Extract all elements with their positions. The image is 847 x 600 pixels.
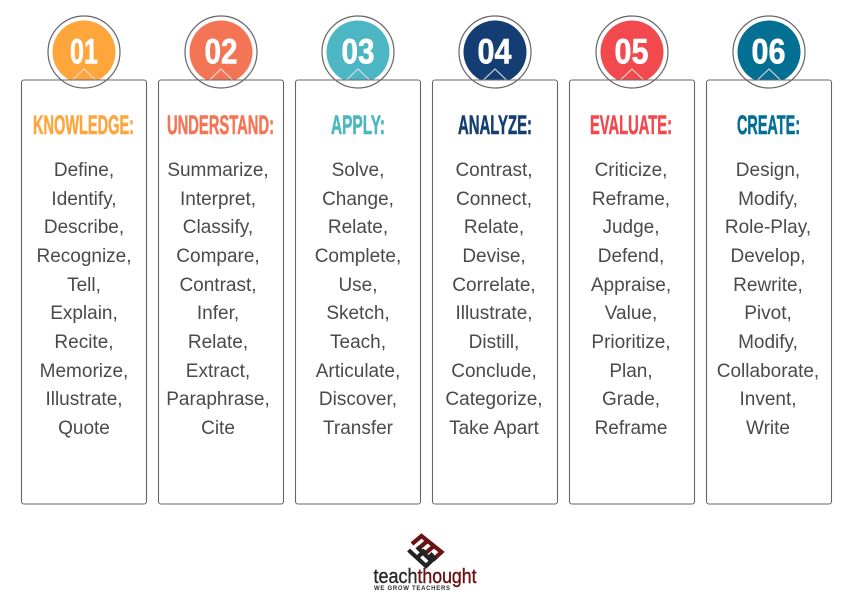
word list: Cite [201, 418, 235, 439]
word list: Reframe [595, 418, 667, 439]
heading: UNDERSTAND: [167, 110, 274, 140]
badge 04 [459, 16, 531, 88]
panel: apply [296, 16, 420, 504]
word list: Rewrite, [733, 275, 803, 296]
word list: Role-Play, [725, 217, 811, 238]
word list: Devise, [462, 246, 526, 267]
badge 06: 06 [752, 32, 786, 72]
word list: Classify, [183, 217, 253, 238]
word list: Grade, [602, 389, 660, 410]
word list: Appraise, [591, 275, 671, 296]
word list: Discover, [319, 389, 397, 410]
word list: Complete, [315, 246, 401, 267]
word list: Transfer [323, 418, 394, 439]
word list: Collaborate, [717, 361, 819, 382]
word list: Value, [605, 303, 657, 324]
badge 03 [322, 16, 394, 88]
word list: Correlate, [452, 275, 536, 296]
heading: EVALUATE: [590, 110, 672, 140]
word list: Tell, [67, 275, 101, 296]
word list: Use, [338, 275, 378, 296]
word list: Paraphrase, [166, 389, 270, 410]
word list: Infer, [197, 303, 239, 324]
word list: Interpret, [180, 189, 256, 210]
badge 05: 05 [614, 32, 648, 72]
word list: Categorize, [445, 389, 543, 410]
heading: ANALYZE: [458, 110, 532, 140]
word list: Define, [54, 160, 114, 181]
card [22, 80, 146, 504]
word list: Relate, [188, 332, 248, 353]
word list: Teach, [330, 332, 386, 353]
word list: Contrast, [455, 160, 533, 181]
icon: diamond mark [408, 536, 442, 566]
badge 02: 02 [204, 32, 238, 72]
word list: Prioritize, [591, 332, 671, 353]
word list: Relate, [464, 217, 524, 238]
panel: evaluate [570, 16, 694, 504]
word list: Identify, [51, 189, 117, 210]
word list: Criticize, [595, 160, 667, 181]
tagline: WE GROW TEACHERS [374, 586, 450, 592]
word list: Distill, [469, 332, 519, 353]
word list: Sketch, [326, 303, 390, 324]
word list: Connect, [456, 189, 532, 210]
badge 04: 04 [478, 32, 512, 72]
word list: Reframe, [592, 189, 670, 210]
word list: Judge, [602, 217, 660, 238]
word list: Illustrate, [455, 303, 533, 324]
wordmark: thought [418, 566, 477, 588]
badge 02 [185, 16, 257, 88]
word list: Write [746, 418, 790, 439]
word list: Summarize, [167, 160, 269, 181]
word list: Articulate, [316, 361, 400, 382]
word list: Explain, [50, 303, 118, 324]
card [570, 80, 694, 504]
word list: Describe, [44, 217, 124, 238]
word list: Contrast, [179, 275, 257, 296]
word list: Compare, [176, 246, 260, 267]
word list: Change, [322, 189, 394, 210]
word list: Illustrate, [45, 389, 123, 410]
wordmark: teach [374, 566, 418, 588]
panel: analyze [432, 16, 558, 504]
word list: Plan, [609, 361, 653, 382]
panel: knowledge [22, 16, 146, 504]
word list: Recite, [54, 332, 114, 353]
badge 06 [733, 16, 805, 88]
badge 03: 03 [342, 32, 374, 72]
word list: Invent, [739, 389, 797, 410]
panel: understand [158, 16, 284, 504]
word list: Defend, [598, 246, 664, 267]
badge 05 [596, 16, 668, 88]
badge 01: 01 [70, 32, 98, 72]
word list: Memorize, [40, 361, 128, 382]
heading: APPLY: [331, 110, 385, 140]
word list: Recognize, [36, 246, 132, 267]
word list: Extract, [186, 361, 250, 382]
word list: Pivot, [744, 303, 792, 324]
word list: Relate, [328, 217, 388, 238]
heading: KNOWLEDGE: [33, 110, 134, 140]
word list: Take Apart [449, 418, 540, 439]
logo: teachthought [374, 536, 477, 592]
panel: create [706, 16, 832, 504]
word list: Design, [736, 160, 800, 181]
word list: Quote [58, 418, 110, 439]
card [432, 80, 558, 504]
word list: Develop, [730, 246, 806, 267]
word list: Solve, [332, 160, 384, 181]
word list: Conclude, [451, 361, 537, 382]
word list: Modify, [738, 332, 798, 353]
card [706, 80, 832, 504]
card [158, 80, 284, 504]
card [296, 80, 420, 504]
word list: Modify, [738, 189, 798, 210]
badge 01 [48, 16, 120, 88]
